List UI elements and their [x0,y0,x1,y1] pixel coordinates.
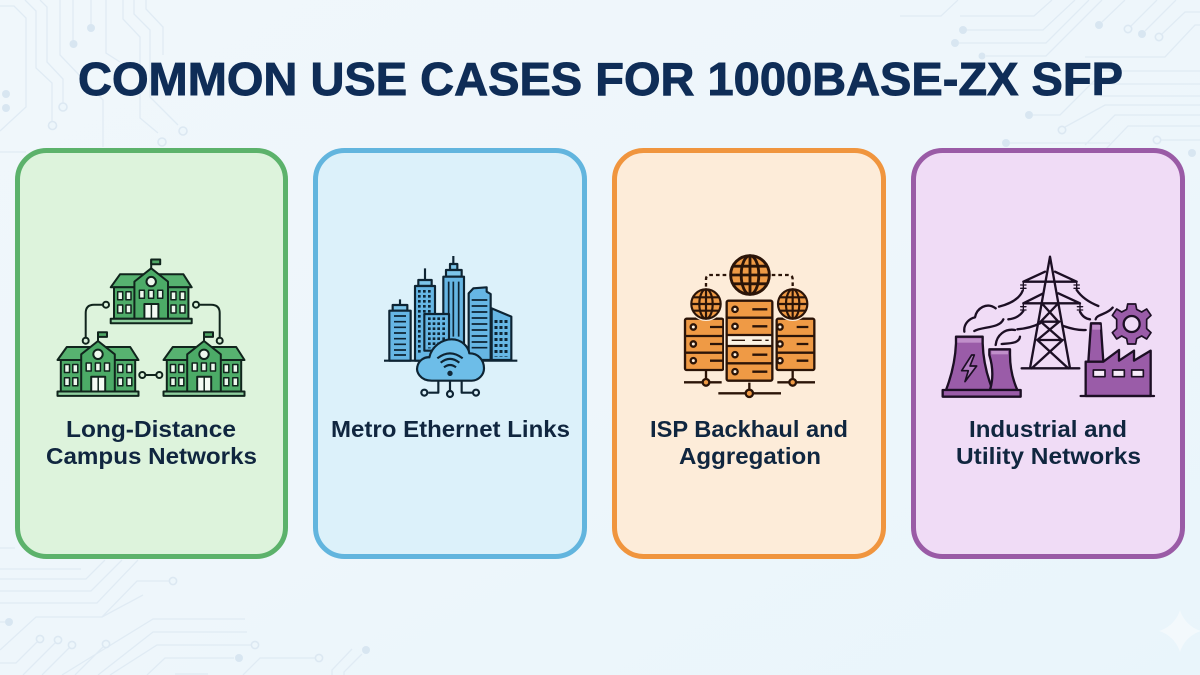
label: Metro Ethernet Links [331,416,570,442]
title: COMMON USE CASES FOR 1000BASE-ZX SFP [78,53,1123,105]
label: Aggregation [679,443,821,469]
panel: isp backhaul and aggregation [614,150,884,556]
panel: long-distance campus networks [18,150,286,556]
card background [614,150,884,556]
label [956,416,1141,469]
label [46,416,257,469]
card background [18,150,286,556]
card background [316,150,584,556]
label [650,416,848,469]
panel: industrial and utility networks [914,150,1182,556]
icon: city skyline with cloud [384,256,517,397]
icon: servers and globes [684,253,815,397]
label: Long-Distance [66,416,236,442]
panel: metro ethernet links [316,150,584,556]
card background [914,150,1182,556]
sparkle mark [1159,610,1200,652]
label: Utility Networks [956,443,1141,469]
label: Campus Networks [46,443,257,469]
label: ISP Backhaul and [650,416,848,442]
label: Industrial and [969,416,1127,442]
icon: power plant, pylon and factory [943,257,1154,397]
icon: connected campus buildings [58,260,244,396]
